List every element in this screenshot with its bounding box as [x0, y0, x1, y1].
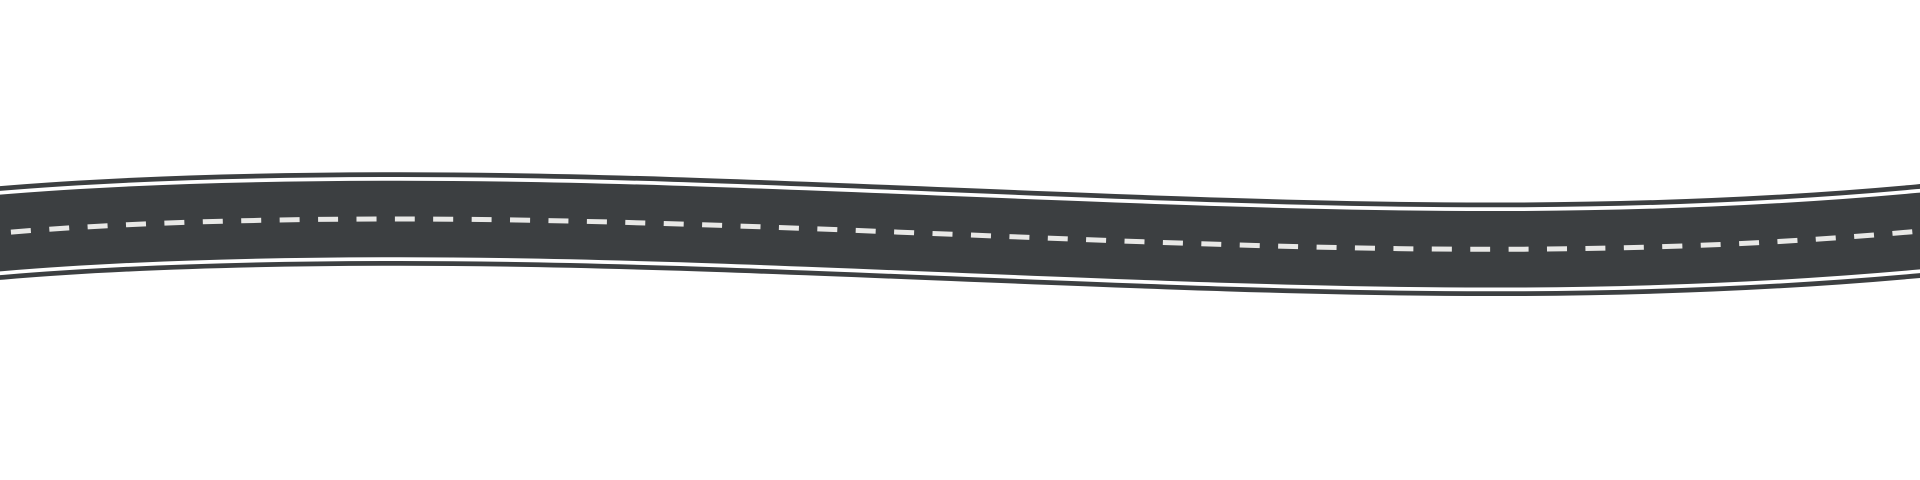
road: [0, 219, 1920, 249]
road white edge line: [0, 219, 1920, 249]
road outer edge: [0, 219, 1920, 249]
road surface: [0, 219, 1920, 249]
dashed centre line: [0, 219, 1920, 249]
